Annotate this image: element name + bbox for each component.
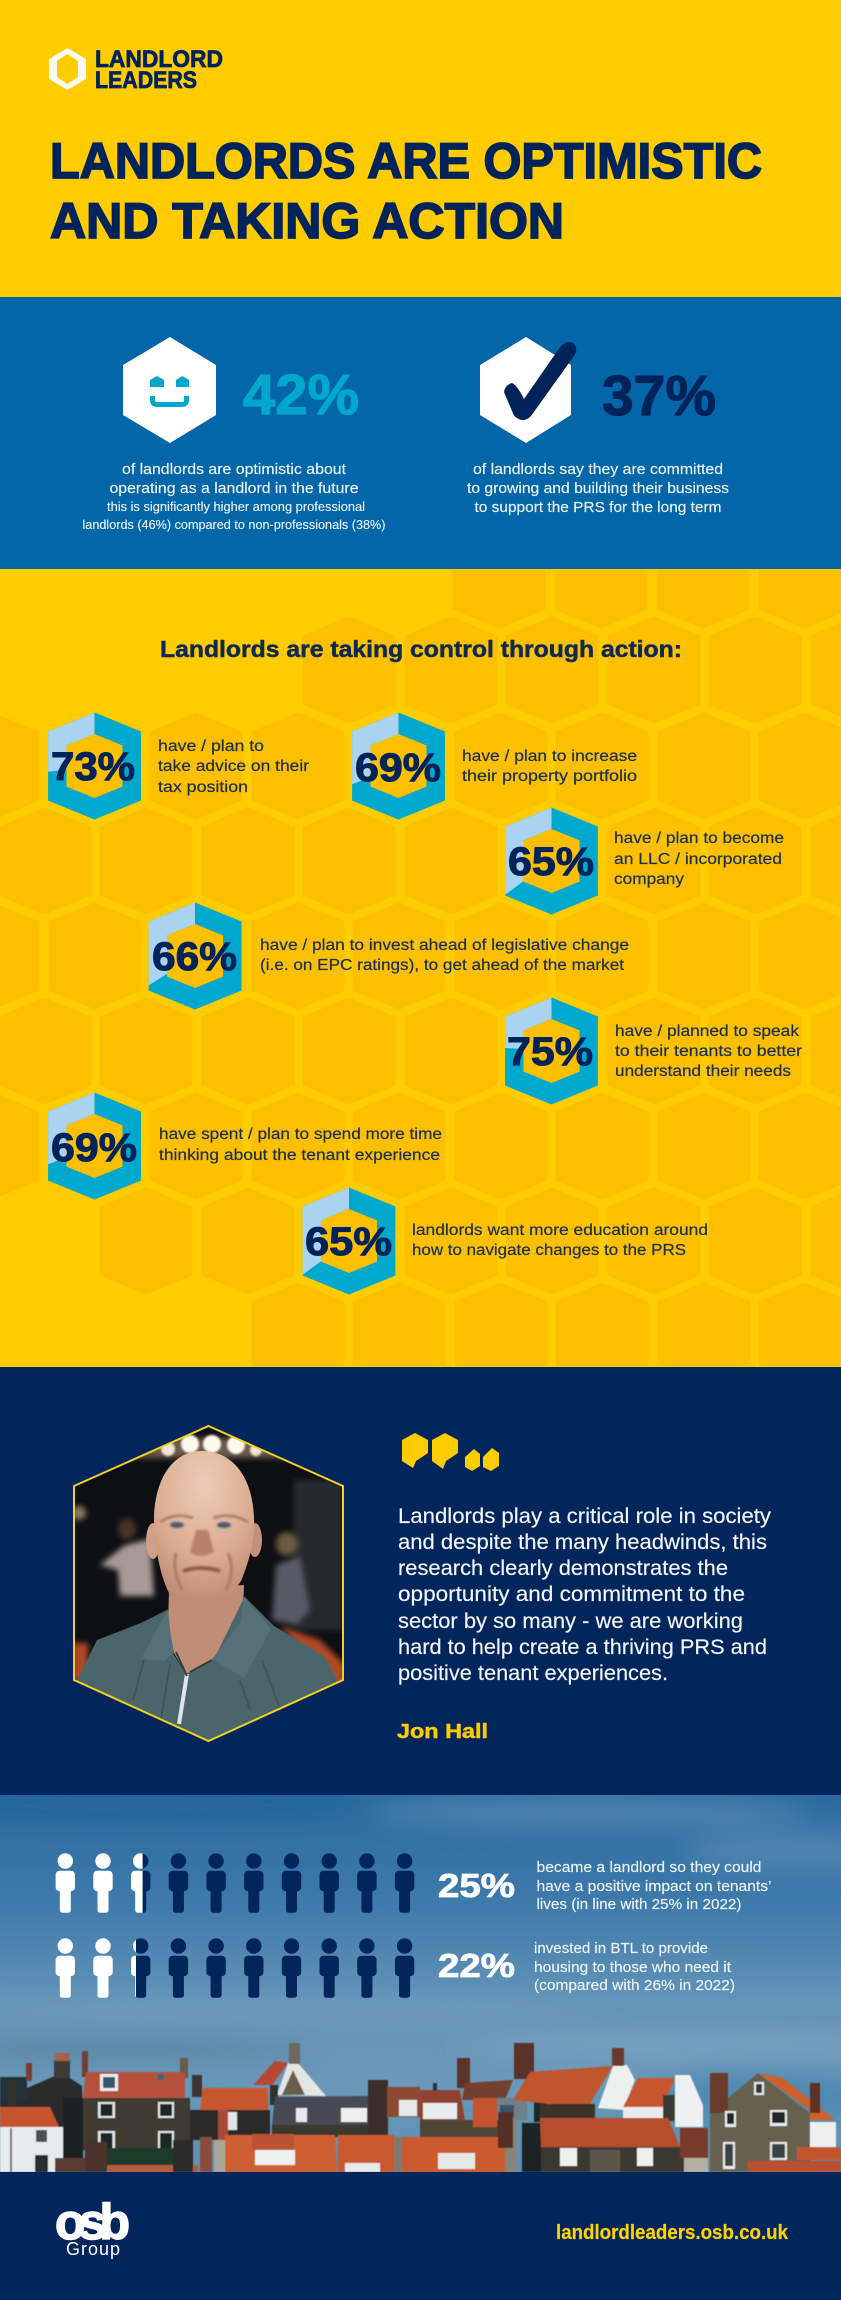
panel: sky with houses <box>0 1795 841 2172</box>
text: commitment description: to growing and building their business <box>467 480 729 497</box>
panel: header <box>0 0 841 297</box>
text: quote: hard to help create a thriving PRS and <box>398 1636 767 1659</box>
stat item: 69% tenant experience: have spent / plan to spend more time <box>159 1126 442 1143</box>
stat item: 69% tenant experience <box>48 1092 442 1200</box>
stat item: 66% legislative change <box>149 902 629 1010</box>
panel: quote <box>0 1367 841 1795</box>
stat item: 69% portfolio: have / plan to increase <box>462 748 637 765</box>
text: quote: positive tenant experiences. <box>398 1662 668 1685</box>
stat item: 69% portfolio: 69% <box>355 746 441 790</box>
shirt <box>72 1596 345 1745</box>
stat item: 65% LLC <box>505 808 784 914</box>
stat item: 65% education: how to navigate changes to the PRS <box>412 1242 686 1259</box>
illustration: rooftops <box>0 2043 841 2172</box>
stat item: 65% LLC: 65% <box>508 840 594 884</box>
stat item: 65% LLC: an LLC / incorporated <box>614 851 782 868</box>
text: commitment description <box>467 461 729 516</box>
text: optimism description: operating as a landlord in the future <box>110 480 358 497</box>
stat: 37%: 37% <box>602 364 716 428</box>
logo: Landlord Leaders <box>49 46 223 94</box>
stat item: 75% tenants: 75% <box>507 1030 593 1074</box>
stat item: 69% portfolio <box>352 712 637 820</box>
main left house <box>82 2098 190 2150</box>
icon: check hexagon <box>480 337 576 443</box>
stat item: 66% legislative change: have / plan to invest ahead of legislative change <box>260 937 629 954</box>
right stone house <box>710 2073 810 2172</box>
stat item: 69% tenant experience: 69% <box>51 1126 137 1170</box>
text: positive impact: became a landlord so they could <box>536 1859 762 1876</box>
text: commitment description: to support the PRS for the long term <box>474 499 722 516</box>
stat item: 75% tenants: understand their needs <box>615 1063 791 1080</box>
text: quote <box>398 1505 772 1685</box>
head <box>154 1451 254 1603</box>
text: quote: Landlords play a critical role in society <box>398 1505 772 1528</box>
stat item: 69% portfolio: their property portfolio <box>462 768 637 785</box>
text: attribution: Jon Hall <box>397 1721 488 1743</box>
neck <box>168 1585 244 1674</box>
text: optimism description <box>82 461 386 532</box>
stat: 22%: 22% <box>438 1947 515 1984</box>
text: optimism description: this is significantly higher among professional <box>107 499 365 514</box>
stat item: 73%: have / plan to <box>158 738 264 755</box>
text: optimism description: landlords (46%) compared to non-professionals (38%) <box>82 517 386 532</box>
stat item: 65% LLC: company <box>614 871 684 888</box>
stat item: 73%: tax position <box>158 779 248 796</box>
stat: 42%: 42% <box>243 363 359 427</box>
title: LANDLORDS ARE OPTIMISTIC <box>50 133 762 189</box>
stat item: 73%: take advice on their <box>158 758 309 775</box>
panel: blue stats <box>0 297 841 569</box>
text: housing: housing to those who need it <box>534 1959 732 1976</box>
logo: Landlord Leaders: LANDLORD <box>95 46 223 73</box>
text: optimism description: of landlords are optimistic about <box>122 461 347 478</box>
stat item: 65% LLC: have / plan to become <box>614 830 784 847</box>
text: housing: (compared with 26% in 2022) <box>534 1977 735 1994</box>
text: positive impact: lives (in line with 25% in 2022) <box>536 1896 742 1913</box>
logo: Landlord Leaders: LEADERS <box>95 67 197 94</box>
chart: people row 25% <box>56 1853 414 1913</box>
centre left <box>190 2110 270 2140</box>
chart: people row 22% <box>56 1938 414 1998</box>
stat: 25%: 25% <box>438 1867 515 1904</box>
stat item: 65% education <box>303 1188 708 1294</box>
white left house <box>0 2127 63 2172</box>
background: clouds <box>0 1795 841 2121</box>
title <box>50 133 762 249</box>
lower roofs <box>85 2142 107 2172</box>
portrait: Jon Hall <box>72 1426 345 1745</box>
stat item: 65% education: 65% <box>305 1220 392 1264</box>
centre right upper <box>420 2120 498 2137</box>
logo: OSB Group: Group <box>66 2239 120 2259</box>
text: positive impact <box>536 1859 772 1913</box>
ears <box>146 1523 158 1559</box>
panel: action stats <box>0 522 841 1390</box>
text: website: landlordleaders.osb.co.uk <box>556 2222 789 2244</box>
stat item: 65% education: landlords want more education around <box>412 1222 708 1239</box>
text: commitment description: of landlords say they are committed <box>473 461 723 478</box>
stat item: 66% legislative change: 66% <box>152 935 237 979</box>
text: quote: opportunity and commitment to the <box>398 1583 745 1606</box>
stat item: 66% legislative change: (i.e. on EPC ratings), to get ahead of the market <box>260 957 625 974</box>
logo: OSB Group: osb <box>55 2194 130 2250</box>
text: housing <box>534 1940 735 1994</box>
panel: footer <box>0 2172 841 2300</box>
title: AND TAKING ACTION <box>50 193 564 249</box>
stat item: 75% tenants <box>505 998 802 1104</box>
icon: quote marks <box>402 1433 499 1471</box>
text: quote: and despite the many headwinds, this <box>398 1531 767 1554</box>
main mid roof <box>522 2123 544 2172</box>
stat item: 73% <box>48 712 309 820</box>
stat item: 69% tenant experience: thinking about the tenant experience <box>159 1147 440 1164</box>
text: housing: invested in BTL to provide <box>534 1940 708 1957</box>
heading: taking control: Landlords are taking control through action: <box>160 636 682 662</box>
stat item: 73%: 73% <box>51 745 135 789</box>
icon: smiley hexagon <box>123 337 216 443</box>
stat item: 75% tenants: to their tenants to better <box>615 1043 802 1060</box>
stat item: 75% tenants: have / planned to speak <box>615 1023 799 1040</box>
text: quote: sector by so many - we are working <box>398 1610 743 1633</box>
text: positive impact: have a positive impact on tenants’ <box>536 1878 772 1895</box>
text: quote: research clearly demonstrates the <box>398 1557 728 1580</box>
